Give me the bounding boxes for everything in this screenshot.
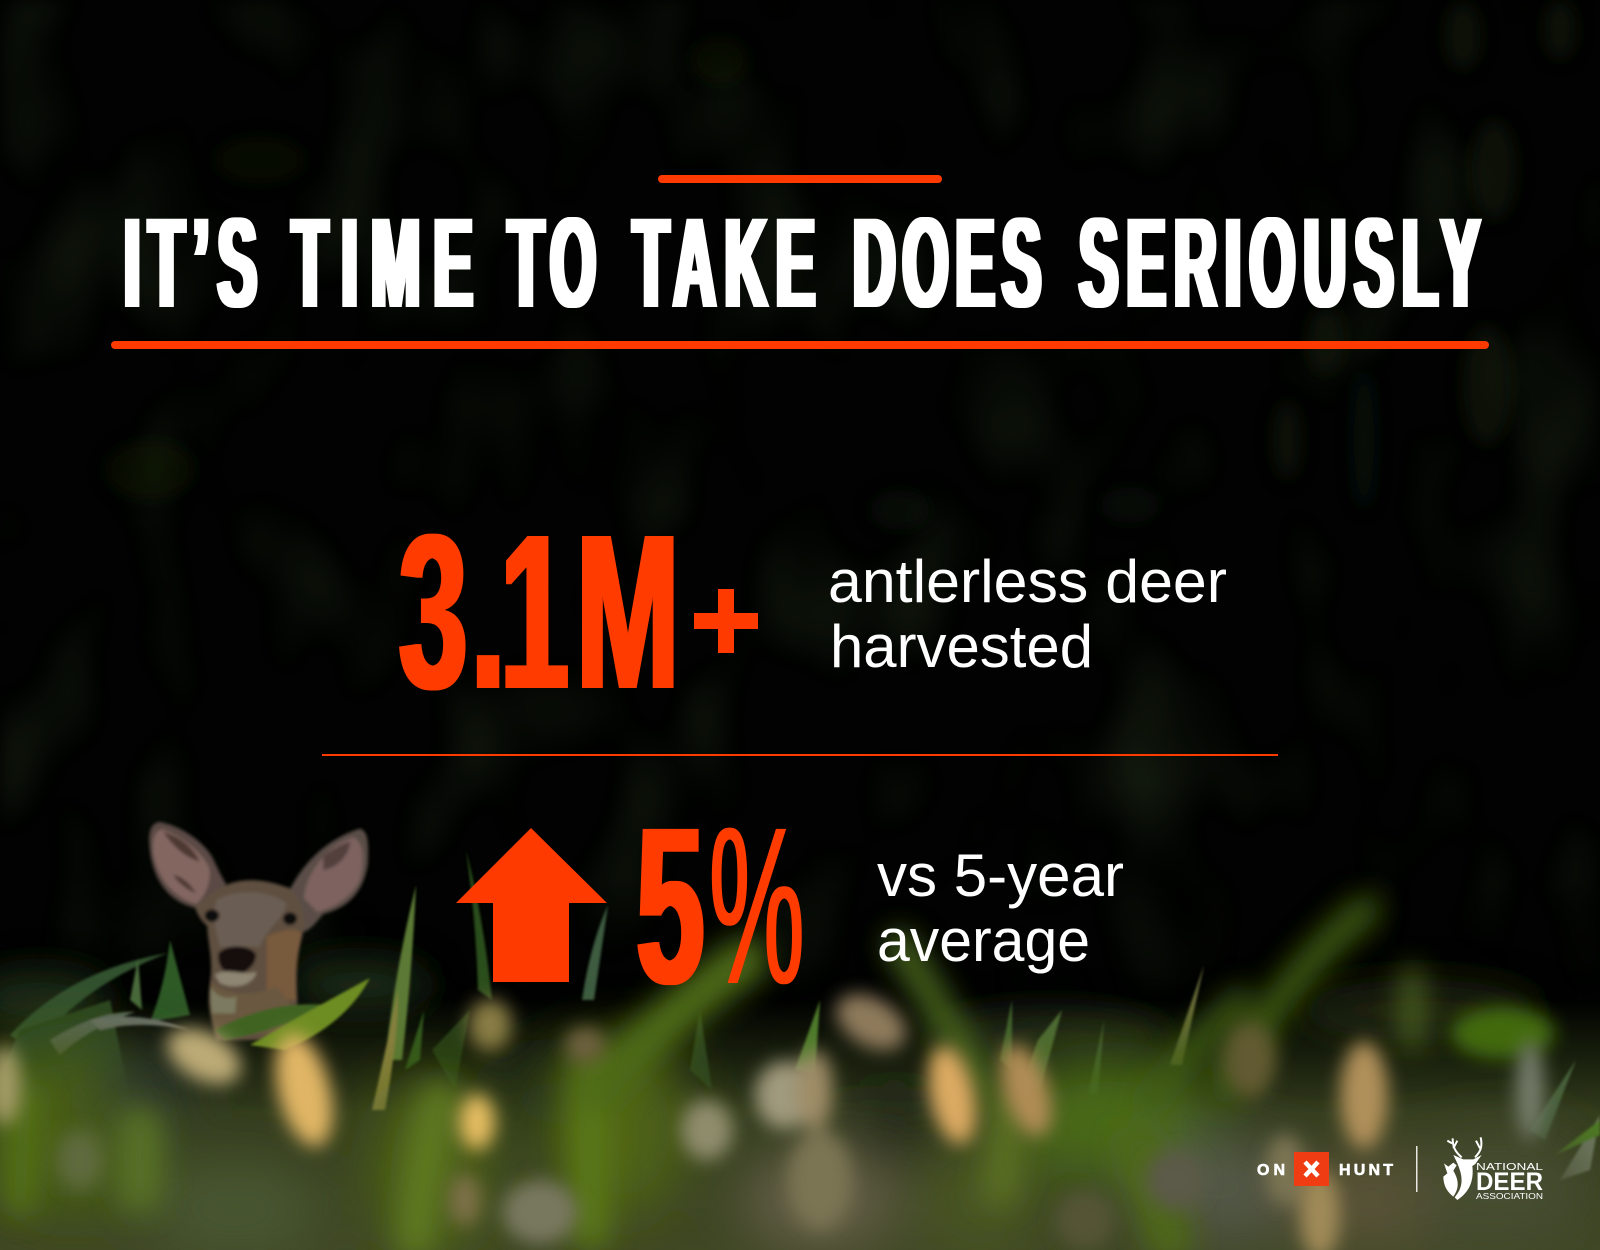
muzzle	[215, 972, 257, 986]
base grass blur	[0, 1000, 1600, 1250]
logo: onX Hunt: HUNT	[1339, 1162, 1393, 1179]
right ear shadow	[323, 842, 350, 870]
stat: 3.1M+ antlerless deer harvested	[399, 488, 1227, 735]
icon: up arrow	[456, 828, 607, 982]
forehead grey	[214, 892, 287, 947]
right ear	[290, 829, 368, 932]
plus sign	[694, 589, 758, 653]
stat caption: harvested	[830, 613, 1093, 680]
nose	[218, 946, 256, 975]
left ear	[149, 822, 226, 908]
title: TO	[508, 193, 596, 335]
bright green leaf at right	[1451, 1007, 1555, 1059]
title: TAKE	[633, 193, 815, 335]
stat caption	[828, 548, 1227, 680]
big percentage	[636, 781, 805, 1031]
mid-ground grass blades	[0, 850, 1600, 1180]
stat caption: average	[877, 907, 1090, 974]
title underline rule	[111, 341, 1489, 349]
sharper leaves near the deer	[215, 978, 370, 1050]
stat: up 5% vs 5-year average	[456, 781, 1124, 1031]
stat caption	[877, 842, 1124, 974]
stat caption: antlerless deer	[828, 548, 1227, 615]
logo: onX Hunt	[1257, 1152, 1393, 1186]
big percentage: %	[709, 782, 805, 1031]
left ear shadow	[163, 832, 200, 893]
logo divider	[1416, 1146, 1418, 1192]
title: IT’S	[124, 193, 257, 335]
green leaf over deer neck	[215, 1004, 330, 1040]
title: SERIOUSLY	[1079, 193, 1480, 335]
stat caption: vs 5-year	[877, 842, 1124, 909]
big percentage: 5	[636, 781, 705, 1031]
divider	[322, 754, 1278, 756]
logo: National Deer Association: ASSOCIATION	[1476, 1191, 1543, 1201]
logo: National Deer Association: DEER	[1476, 1168, 1543, 1196]
green blades	[20, 910, 1412, 1240]
dim mid-ground glow behind deer	[0, 959, 1540, 1070]
title: DOES	[853, 193, 1041, 335]
cheek tan	[267, 930, 302, 1000]
head	[195, 880, 305, 1040]
top short accent rule	[658, 175, 942, 183]
logo: National Deer Association	[1443, 1137, 1544, 1201]
deer peeking above the grass	[149, 822, 368, 1040]
chin and neck	[209, 982, 298, 1033]
leaf cluster left of deer	[10, 953, 168, 1050]
logo: National Deer Association: NATIONAL	[1476, 1162, 1544, 1173]
left eye	[205, 909, 219, 922]
icon: deer shield	[1443, 1137, 1482, 1200]
logo: onX Hunt: ON	[1257, 1162, 1285, 1179]
bright leaf	[250, 978, 370, 1050]
title	[124, 193, 1480, 335]
right eye	[283, 912, 297, 925]
cream seed heads	[0, 982, 1544, 1250]
right ear inner	[304, 837, 363, 912]
large soft colour fields	[0, 1040, 1590, 1250]
big number: 3.1M	[399, 488, 679, 735]
white throat	[210, 987, 237, 1013]
blades	[385, 885, 416, 1060]
blurred foreground grass	[0, 910, 1590, 1250]
title: TIME	[292, 193, 473, 335]
left ear inner	[153, 829, 210, 904]
